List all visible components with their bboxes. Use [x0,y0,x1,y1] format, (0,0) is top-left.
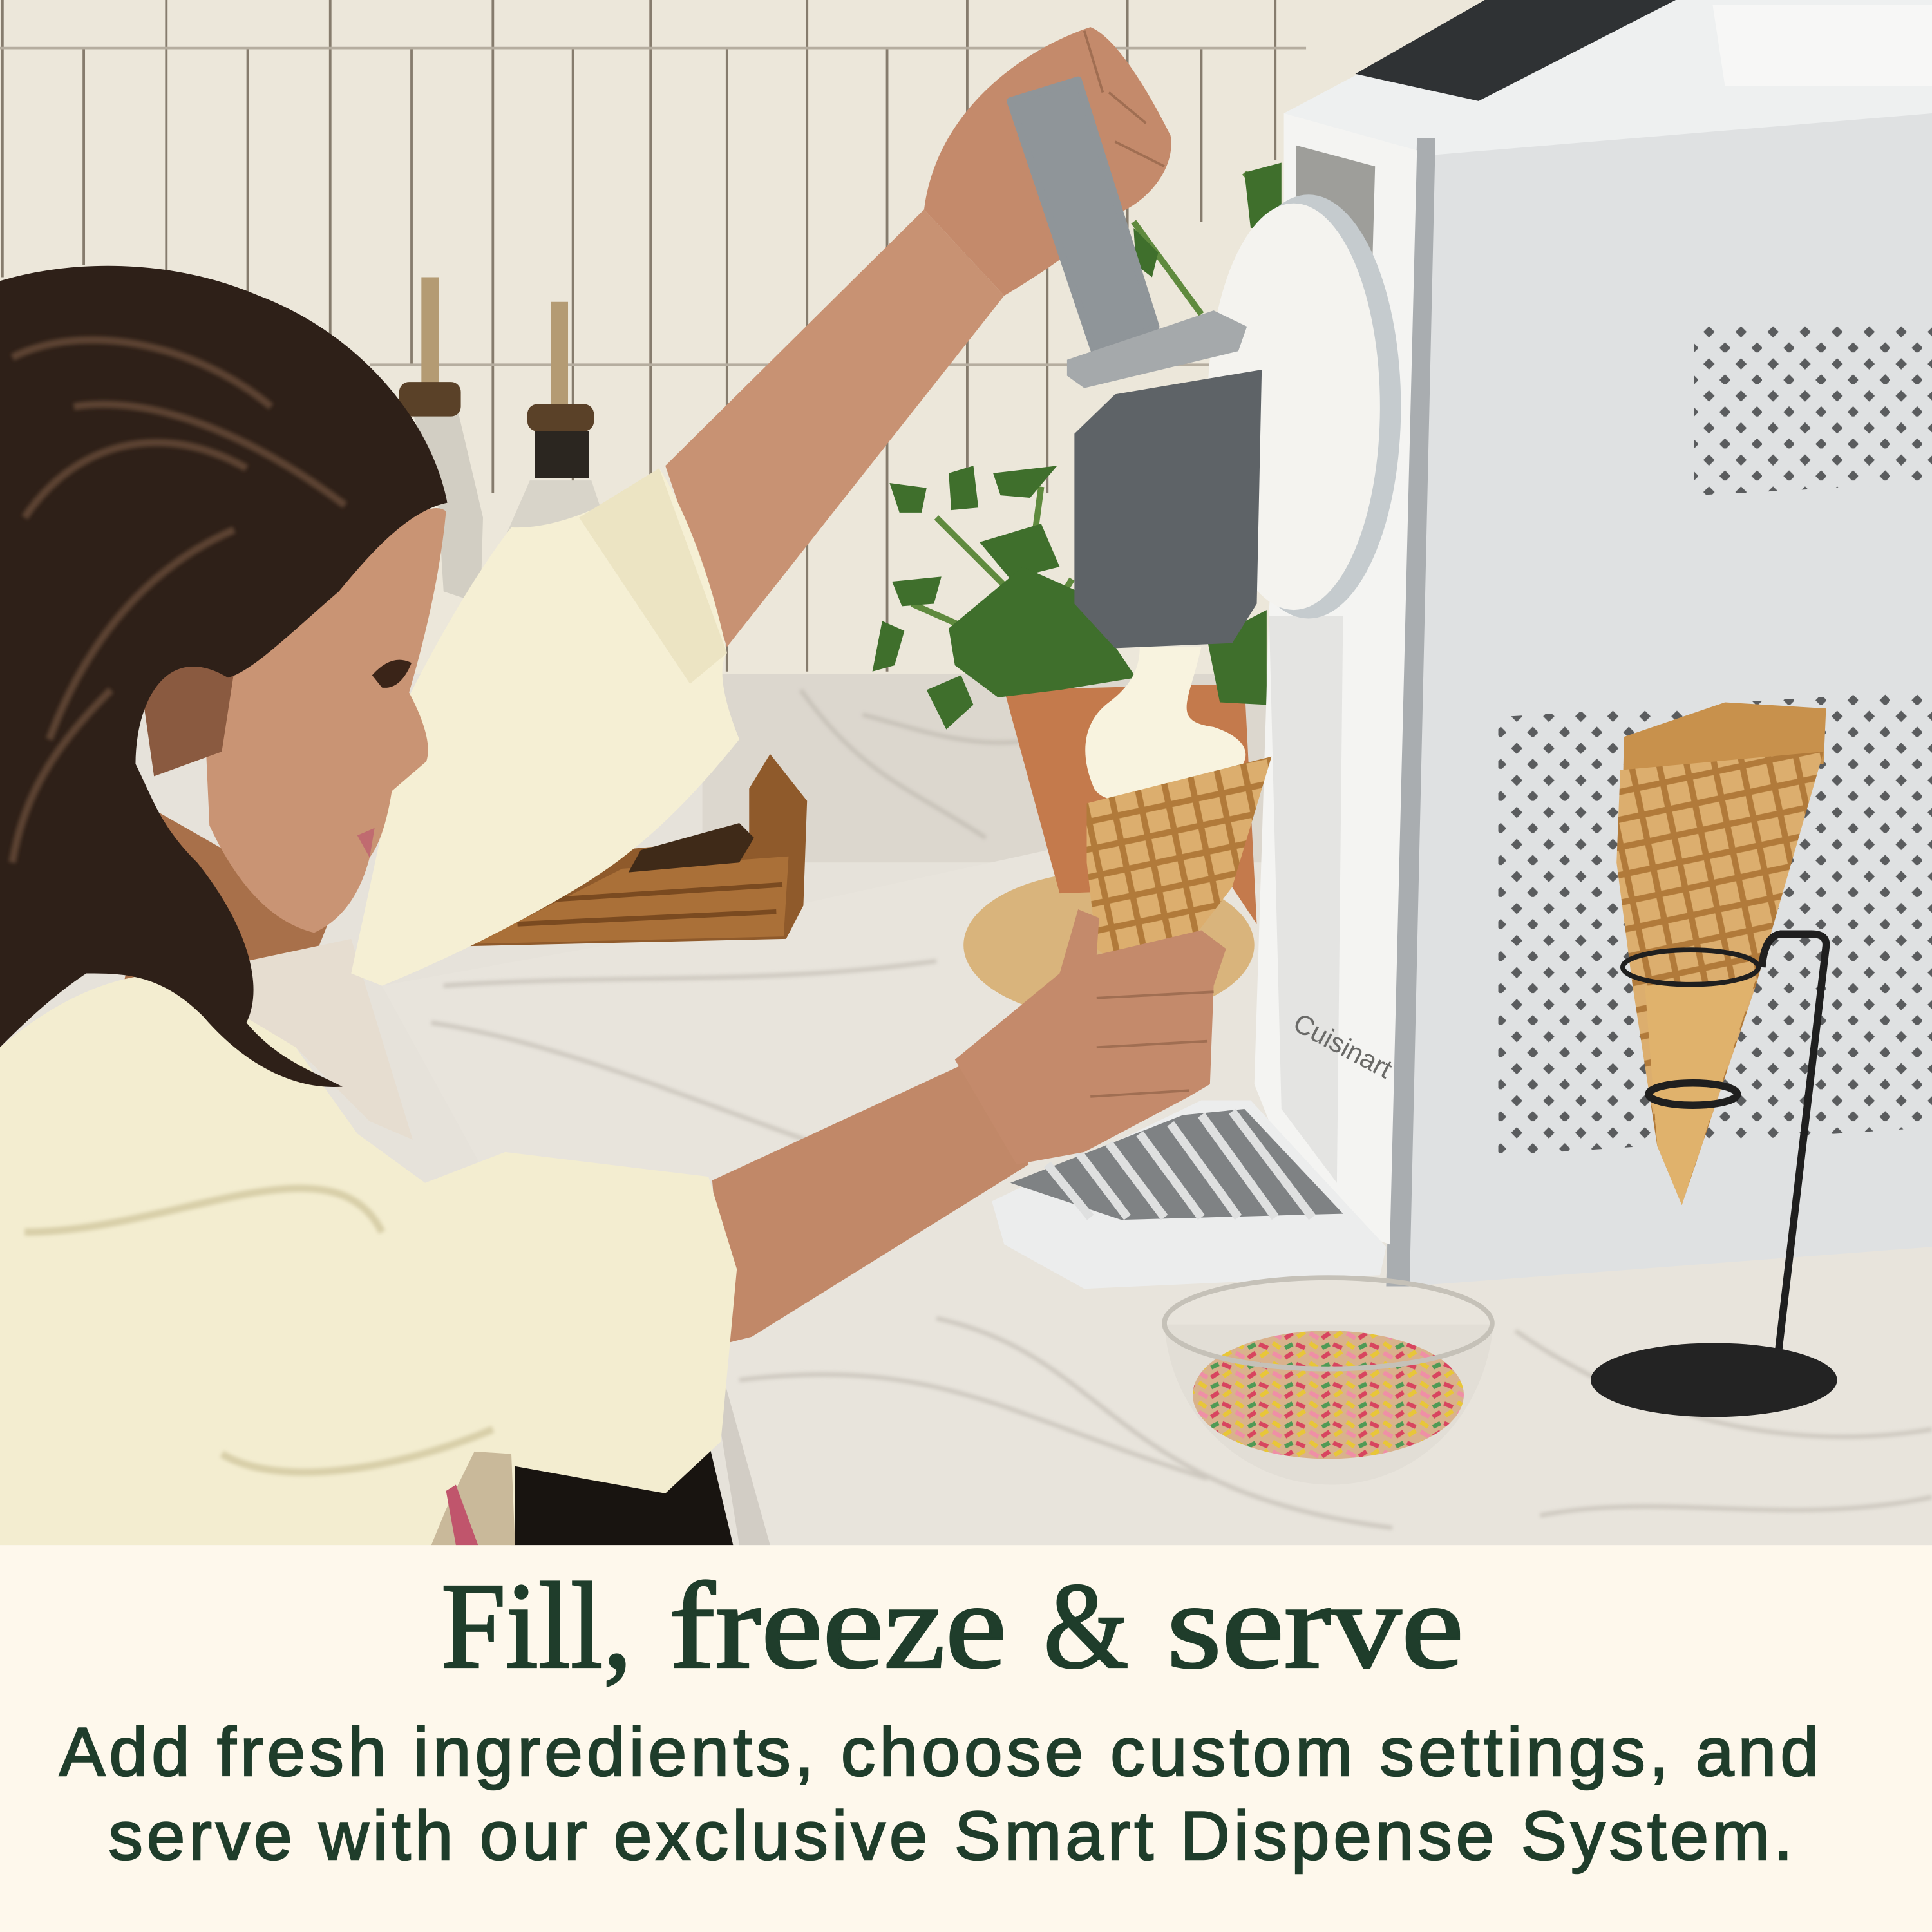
soft serve machine [992,0,1932,1289]
wicker basket [462,754,807,946]
side panel [1407,113,1932,1286]
logo: Cuisinart [1289,1007,1397,1084]
cone stand [1591,934,1837,1417]
raised arm and hand [665,27,1171,647]
raised sleeve [351,468,739,986]
apron stripe [431,1452,515,1545]
stems [912,173,1282,653]
lower arm [712,1059,1029,1343]
face [204,508,446,933]
machine top [1284,0,1932,160]
dial [1208,194,1401,618]
oil bottles [399,277,604,604]
handle [1010,80,1156,357]
tiled wall [0,0,1932,1545]
eye [372,660,412,688]
neck [123,813,333,986]
title: Fill, [441,1558,632,1694]
dispenser handle [1010,80,1262,648]
caption panel [0,1545,1932,1932]
potted plant on wood board [873,163,1282,1019]
waffle cone on stand [1616,703,1826,1205]
under counter shadow [511,1442,733,1545]
upper vent [1694,323,1932,495]
title: & [1044,1558,1129,1694]
sprinkle bowl [1164,1278,1493,1484]
control panel [1356,0,1676,101]
spout [1074,370,1262,648]
marble counter [382,674,1932,1545]
raised forearm [665,209,1004,647]
drip tray [992,1101,1386,1289]
collar [1067,310,1247,388]
lower hand [955,909,1226,1164]
front panel [1255,113,1417,1244]
ear [142,663,234,776]
ice cream swirl [1085,647,1245,802]
lid [1712,5,1932,86]
lips [357,828,375,858]
subtitle line 2: serve with our exclusive Smart Dispense System. [108,1797,1793,1874]
metal edge [1386,138,1435,1286]
lower vent [1499,690,1932,1156]
subtitle line 1: Add fresh ingredients, choose custom settings, and [59,1713,1819,1790]
sweater body [0,973,737,1545]
title [441,1558,1464,1694]
hair [0,266,448,1087]
undershirt [111,939,413,1140]
steel plate [1296,146,1375,256]
raised hand [924,27,1171,296]
leaves [873,163,1282,730]
title: serve [1167,1558,1464,1694]
title: freeze [669,1558,1007,1694]
waffle cone in hand [1087,757,1271,992]
girl [0,266,1226,1545]
